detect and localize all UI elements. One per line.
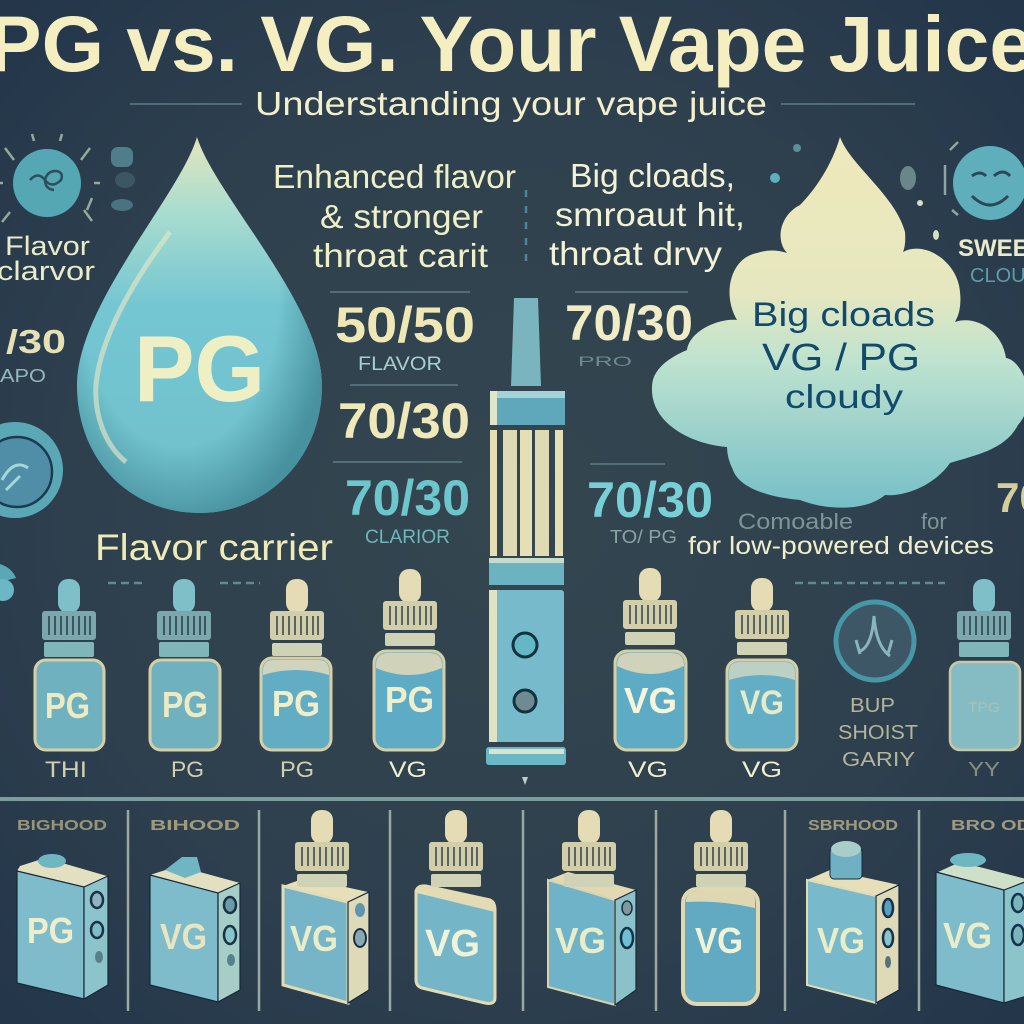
device 1 <box>17 817 108 999</box>
VG bottle 2: VG <box>740 684 784 722</box>
ratio: 70/30 top right: PRO <box>578 353 632 369</box>
badge: bup shoist: GARIY <box>842 749 915 771</box>
PG water drop <box>77 137 322 513</box>
device 7 <box>807 817 899 1003</box>
bottle device 3 <box>283 810 369 1003</box>
text: for: for <box>921 509 947 534</box>
ratio: 70/30 center left: 70/30 <box>338 393 470 449</box>
icon: left badge <box>0 422 63 601</box>
badge: bup shoist <box>836 602 918 771</box>
divider <box>0 797 1024 801</box>
ratio: 70/30 lower right: TO/ PG <box>610 527 677 547</box>
device 8: BRO OD <box>951 817 1024 834</box>
text: PG benefits: throat carit <box>313 237 488 274</box>
cloud label: VG / PG <box>762 337 920 379</box>
badge: bup shoist: SHOIST <box>838 722 918 744</box>
VG bottle 2: VG <box>742 757 782 782</box>
subtitle: Understanding your vape juice <box>255 85 767 122</box>
bottle VG 6 <box>683 810 758 1004</box>
text: VG benefits: throat drvy <box>549 235 723 272</box>
device 2 <box>150 817 240 1002</box>
bottle 7: TPG <box>968 699 1000 715</box>
bottle 7: YY <box>968 759 1000 781</box>
ratio: left edge <box>0 323 66 386</box>
device 1: PG <box>27 910 74 951</box>
device 2: BIHOOD <box>150 817 240 834</box>
ratio: 50/50 flavor: FLAVOR <box>358 354 442 375</box>
ratio: 70/30 clarior: 70/30 <box>345 470 470 526</box>
bottle device 5 <box>548 810 636 1005</box>
label: flavor clarity: Flavor <box>5 231 90 261</box>
PG bottle 3 <box>261 579 331 782</box>
bottle device 3: VG <box>290 918 338 959</box>
device 8 <box>936 817 1024 1003</box>
label: sweet cloud: CLOU <box>970 265 1024 287</box>
ratio: 70/30 clarior: CLARIOR <box>365 527 450 548</box>
device 8: VG <box>943 915 992 956</box>
VG bottle 1: VG <box>624 680 677 721</box>
VG bottle 2 <box>727 578 797 782</box>
device 7: SBRHOOD <box>808 817 898 834</box>
PG bottle 4: VG <box>389 757 427 782</box>
bottle 7 <box>950 579 1020 781</box>
PG bottle 1: PG <box>45 685 90 726</box>
bottle VG 4 <box>416 810 495 1003</box>
column separators <box>128 810 919 1011</box>
PG bottle 1 <box>35 579 104 782</box>
bottle device 5: VG <box>555 920 606 961</box>
text: PG benefits: & stronger <box>320 198 483 235</box>
PG bottle 3: PG <box>272 683 320 724</box>
device 1: BIGHOOD <box>17 817 107 834</box>
bottle VG 6: VG <box>695 920 743 961</box>
text: comparable: Comoable <box>738 509 853 534</box>
ratio: 70/30 lower right: 70/30 <box>587 472 713 528</box>
vape pen <box>486 298 566 785</box>
text: low powered devices: for low-powered devices <box>688 532 994 560</box>
PG bottle 4 <box>374 569 444 782</box>
PG bottle 1: THI <box>45 757 87 782</box>
ratio: left edge: APO <box>0 366 46 386</box>
VG bottle 1 <box>615 568 686 782</box>
PG bottle 2: PG <box>171 757 204 782</box>
ratio: 50/50 flavor <box>335 297 475 375</box>
icon: sweet cloud <box>770 142 1024 240</box>
label: sweet cloud <box>958 235 1024 287</box>
device 2: VG <box>160 916 207 957</box>
title: PG vs. VG. Your Vape Juice <box>0 0 1024 88</box>
PG bottle 2: PG <box>162 684 208 725</box>
PG bottle 3: PG <box>280 757 314 782</box>
bottle VG 4: VG <box>425 923 480 965</box>
PG bottle 2 <box>150 579 220 782</box>
VG bottle 1: VG <box>628 757 668 782</box>
icon: flavor clarity <box>0 134 135 222</box>
ratio: 50/50 flavor: 50/50 <box>335 297 475 353</box>
badge: bup shoist: BUP <box>850 695 895 717</box>
cloud label: cloudy <box>785 378 904 415</box>
drop label: PG <box>134 316 265 421</box>
device 7: VG <box>817 920 865 961</box>
label: flavor carrier: Flavor carrier <box>95 527 333 568</box>
text: VG benefits: smroaut hit, <box>555 196 745 233</box>
text: PG benefits: Enhanced flavor <box>273 158 516 195</box>
ratio: left edge: /30 <box>6 323 66 360</box>
text: VG benefits: Big cloads, <box>570 157 735 194</box>
PG bottle 4: PG <box>385 679 434 720</box>
ratio: 70/30 top right: 70/30 <box>565 295 693 351</box>
VG cloud <box>652 137 1024 508</box>
cloud label: Big cloads <box>752 296 935 334</box>
